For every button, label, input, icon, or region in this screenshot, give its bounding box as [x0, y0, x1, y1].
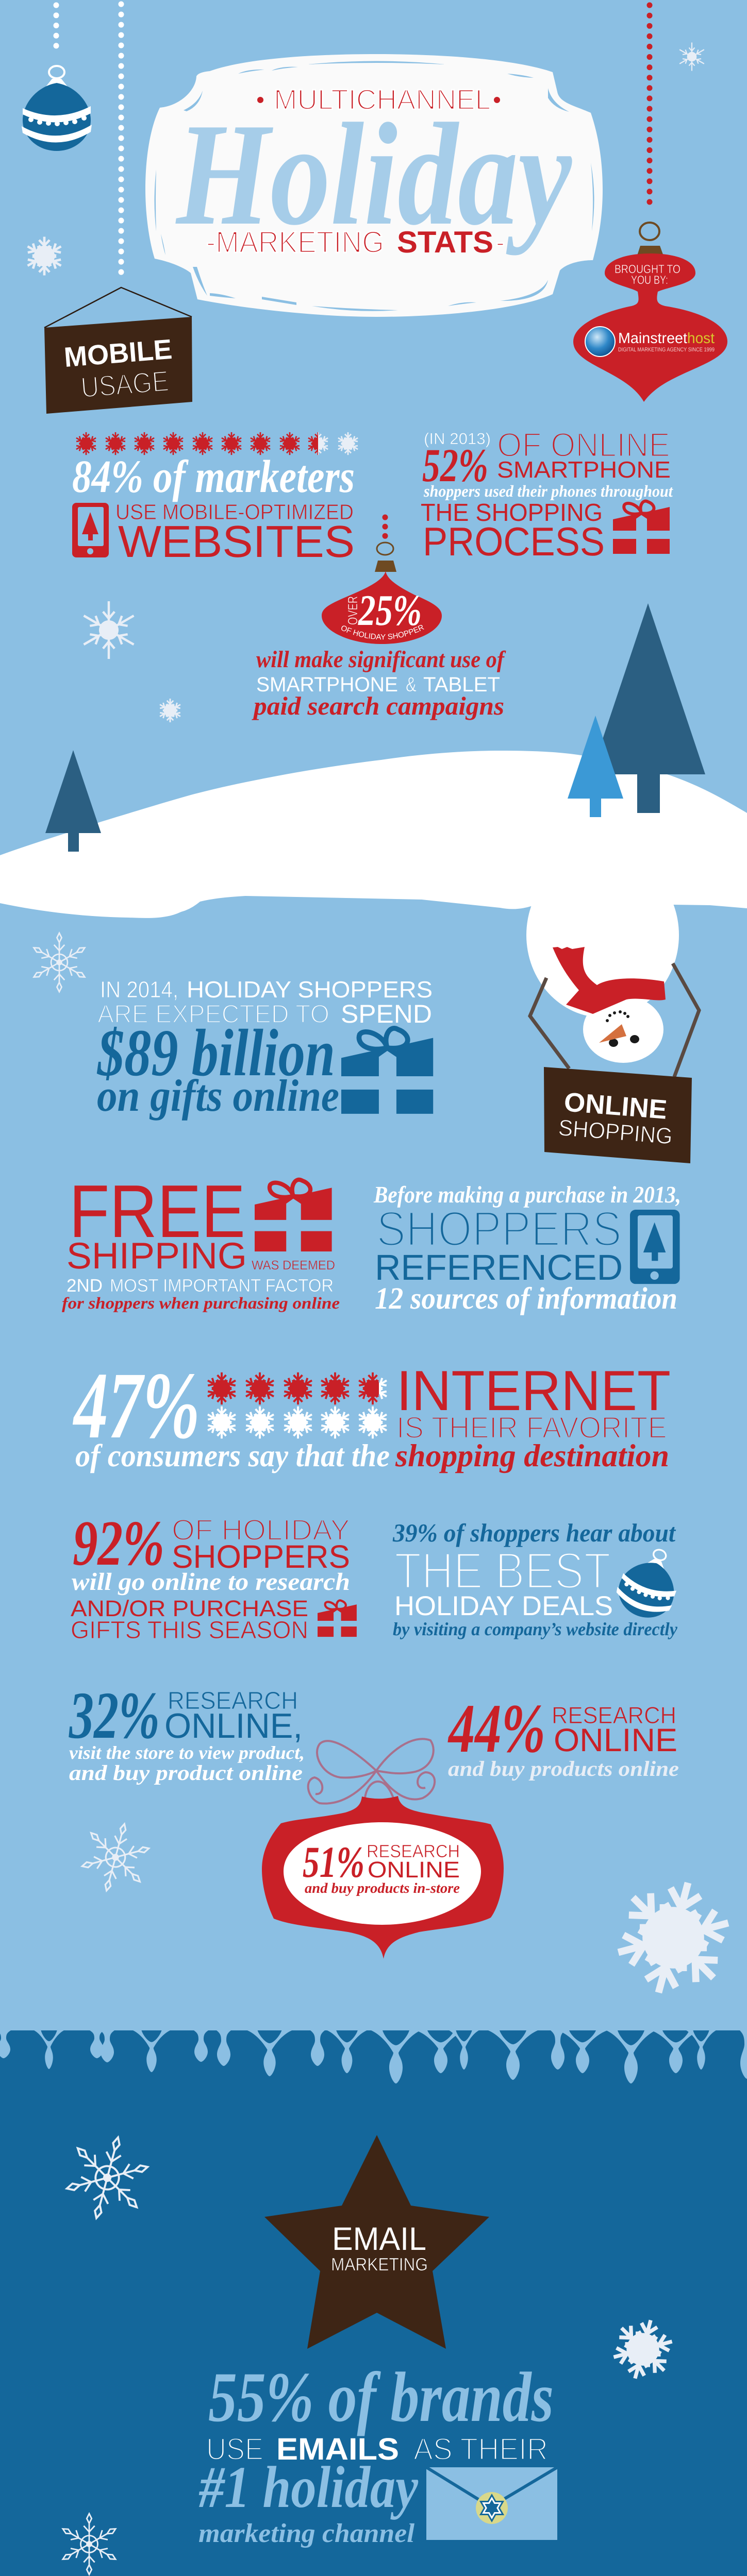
stat: paid search campaigns: paid search campaigns: [252, 691, 504, 720]
ornament: 51% research online: and buy products in-store: [305, 1880, 460, 1896]
stat: 49% of all emails: [121, 2560, 643, 2576]
stat: 47% internet: of consumers say that the: [75, 1438, 390, 1473]
stat: shoppers referenced 12 sources: REFERENCED: [375, 1247, 623, 1287]
snowflake thin: [58, 2127, 157, 2228]
stat: shoppers referenced 12 sources: SHOPPERS: [376, 1201, 622, 1257]
brought to you by: [615, 262, 680, 286]
stat: free shipping: WAS DEEMED: [252, 1258, 335, 1273]
star: email marketing: MARKETING: [331, 2255, 428, 2275]
stat: paid search campaigns: will make significant use of: [256, 646, 506, 672]
brought to you by: BROUGHT TO: [615, 262, 680, 276]
stat: free shipping: [62, 1170, 340, 1312]
logo: Mainstreethost wordmark: host: [687, 330, 715, 347]
stat: 39% the best holiday deals: by visiting a company’s website directly: [393, 1619, 678, 1639]
stat: 55% of brands: [198, 2358, 557, 2548]
stat: shoppers referenced 12 sources: Before making a purchase in 2013,: [373, 1181, 681, 1208]
stat: 92% of holiday shoppers: AND/OR PURCHASE: [71, 1596, 308, 1621]
snowflake grid 47 percent: [205, 1372, 389, 1438]
stat: free shipping: for shoppers when purchasing online: [62, 1294, 340, 1312]
ornament: 51% research online: RESEARCH: [367, 1841, 460, 1861]
stat: $89 billion on gifts online: ARE EXPECTED TO: [97, 999, 329, 1028]
icon: blue gift: [341, 1028, 433, 1114]
icon: tilted ornament: [610, 1540, 688, 1625]
logo: Mainstreethost wordmark: [618, 330, 715, 353]
star: email marketing: [264, 2135, 489, 2349]
stat: 32% research online: RESEARCH: [168, 1687, 298, 1715]
snowflake left: [25, 237, 64, 275]
snowflake thin: [31, 933, 87, 992]
stat: 47% internet: INTERNET: [396, 1359, 671, 1422]
stat: 52% of online smartphone shoppers: 52%: [422, 439, 488, 492]
stat: 44% research online: ONLINE: [554, 1722, 677, 1758]
icon: phone: [72, 503, 109, 557]
stat: $89 billion on gifts online: HOLIDAY SHOPPERS: [187, 976, 433, 1003]
section: mobile usage header: [22, 4, 727, 414]
stat: 84% of marketers: USE MOBILE-OPTIMIZED: [115, 500, 354, 524]
stat: 92% of holiday shoppers: [71, 1508, 357, 1644]
sign: online shopping: ONLINE: [563, 1087, 668, 1125]
stat: 84% of marketers: WEBSITES: [118, 517, 355, 567]
title plaque: [145, 54, 603, 317]
stat: $89 billion on gifts online: [96, 976, 433, 1121]
snow hill: [0, 751, 747, 918]
icon: gift: [255, 1180, 332, 1251]
stat: free shipping: SHIPPING: [67, 1235, 247, 1277]
stat: 52% of online smartphone shoppers: PROCESS: [423, 519, 605, 564]
scene: snow hill with trees: [0, 603, 747, 918]
snowflake small: [158, 699, 182, 722]
tree: left dark: [45, 750, 101, 852]
icon: blue ornament: [22, 66, 92, 151]
subtitle: marketing stats: -MARKETING: [206, 225, 384, 259]
stat: 92% of holiday shoppers: GIFTS THIS SEASON: [71, 1617, 308, 1644]
stat: $89 billion on gifts online: IN 2014,: [100, 976, 178, 1003]
stat: 39% the best holiday deals: HOLIDAY DEALS: [394, 1591, 613, 1621]
sponsor ornament: [573, 223, 727, 402]
snowflake thin: [75, 1816, 156, 1899]
sign: mobile usage: USAGE: [79, 364, 170, 404]
stat: 32% research online: and buy product online: [69, 1761, 303, 1785]
stat: 55% of brands: EMAILS: [276, 2432, 399, 2466]
stat: free shipping: FREE: [69, 1170, 245, 1253]
subtitle: marketing stats: STATS: [397, 225, 493, 259]
stat: paid search campaigns: TABLET: [423, 673, 500, 696]
stat: paid search campaigns: [252, 646, 506, 720]
stat: 92% of holiday shoppers: will go online to research: [72, 1568, 350, 1596]
title: Holiday: Holiday: [174, 93, 573, 256]
section: mobile stats: [72, 426, 673, 722]
stat: paid search campaigns: SMARTPHONE: [256, 673, 398, 696]
stat: free shipping: 2ND: [67, 1276, 103, 1296]
upside-down snowman: [526, 853, 699, 1077]
stat: paid search campaigns: &: [406, 673, 417, 696]
stat: 55% of brands: marketing channel: [198, 2519, 415, 2548]
ornament: over 25% of holiday shoppers: OVER: [345, 596, 360, 625]
ornament: over 25% of holiday shoppers: [322, 514, 442, 644]
stat: 52% of online smartphone shoppers: OF ONLINE: [497, 426, 670, 464]
ornament: over 25% of holiday shoppers: OF HOLIDAY SHOPPERS: [341, 625, 424, 640]
sign: online shopping: [544, 1067, 692, 1163]
stat: $89 billion on gifts online: $89 billion: [96, 1016, 335, 1090]
stat: 55% of brands: #1 holiday: [198, 2454, 419, 2520]
stat: 84% of marketers: [72, 432, 359, 567]
stat: shoppers referenced 12 sources: [373, 1181, 681, 1315]
stat: 52% of online smartphone shoppers: shoppers used their phones throughout: [423, 482, 673, 500]
stat: 92% of holiday shoppers: 92%: [73, 1508, 164, 1579]
snowflake top right: [678, 42, 706, 71]
brought to you by: YOU BY:: [631, 273, 668, 286]
tree: light blue: [568, 716, 623, 817]
ornament: over 25% of holiday shoppers: 25%: [357, 586, 422, 635]
stat: 92% of holiday shoppers: SHOPPERS: [172, 1539, 350, 1575]
stat: $89 billion on gifts online: on gifts online: [97, 1071, 339, 1121]
stat: shoppers referenced 12 sources: 12 sources of information: [375, 1281, 677, 1315]
stat: 55% of brands: 55% of brands: [208, 2358, 554, 2436]
stat: 47% internet: [72, 1371, 670, 1473]
stat: $89 billion on gifts online: SPEND: [341, 999, 432, 1028]
title line: multichannel: MULTICHANNEL: [274, 83, 491, 115]
stat: 47% internet: shopping destination: [395, 1438, 669, 1473]
sign: mobile usage: [44, 287, 192, 414]
stat: 47% internet: 47%: [73, 1353, 200, 1459]
tree: large dark: [591, 603, 705, 813]
snowflake large: [603, 1868, 743, 2008]
string of white beads to sign: [119, 4, 124, 281]
snowflake thin: [60, 2514, 118, 2574]
stat: 44% research online: and buy products online: [448, 1757, 679, 1781]
stat: 32% research online: [69, 1679, 305, 1785]
stat: 44% research online: 44%: [447, 1690, 545, 1767]
stat: 55% of brands: AS THEIR: [413, 2432, 548, 2466]
snowflake solid: [606, 2312, 680, 2386]
icon: small gift: [318, 1600, 357, 1637]
stat: 44% research online: [447, 1690, 679, 1781]
stat: 32% research online: ONLINE,: [164, 1706, 303, 1745]
stat: 44% research online: RESEARCH: [552, 1702, 676, 1728]
ornament: 51% research online: ONLINE: [368, 1857, 460, 1883]
subtitle: marketing stats: -: [496, 225, 505, 259]
sign: mobile usage: MOBILE: [63, 334, 173, 373]
subtitle: marketing stats: [206, 225, 505, 259]
stat: 32% research online: visit the store to view product,: [69, 1742, 305, 1763]
dark blue band: [0, 2030, 747, 2576]
stat: 39% the best holiday deals: [392, 1518, 688, 1639]
stat: 52% of online smartphone shoppers: (IN 2013): [424, 430, 491, 448]
section: online shopping: [31, 853, 743, 2008]
string of white beads left: [54, 5, 59, 56]
icon: red gift: [613, 501, 670, 554]
icicle border: [0, 2030, 747, 2083]
stat: 84% of marketers: 84% of marketers: [72, 451, 355, 502]
sign: online shopping: SHOPPING: [557, 1115, 673, 1149]
stat: 39% the best holiday deals: THE BEST: [394, 1542, 611, 1600]
logo: globe: [585, 327, 615, 357]
stat: 55% of brands: USE: [206, 2432, 263, 2466]
stat: 39% the best holiday deals: 39% of shoppers hear about: [392, 1518, 676, 1547]
string of red beads: [646, 5, 653, 211]
icon: envelope: [426, 2467, 557, 2540]
snowflake: [81, 601, 137, 659]
logo: Mainstreethost wordmark: Mainstreet: [618, 330, 687, 347]
stat: 92% of holiday shoppers: OF HOLIDAY: [172, 1514, 350, 1547]
star: email marketing: EMAIL: [332, 2221, 426, 2257]
snowflake row 84 percent: [75, 432, 359, 455]
stat: 47% internet: IS THEIR FAVORITE: [396, 1411, 667, 1445]
section: email marketing: [0, 2030, 747, 2576]
stat: 52% of online smartphone shoppers: [421, 426, 673, 564]
ornament: 51% research online: 51%: [303, 1837, 364, 1887]
stat: 52% of online smartphone shoppers: THE SHOPPING: [421, 499, 603, 527]
stat: free shipping: MOST IMPORTANT FACTOR: [110, 1276, 334, 1296]
stat: 32% research online: 32%: [69, 1679, 160, 1753]
logo: Mainstreethost wordmark: DIGITAL MARKETING AGENCY SINCE 1999: [618, 347, 715, 353]
stat: 52% of online smartphone shoppers: SMARTPHONE: [497, 456, 671, 483]
ornament: 51% research online: [262, 1739, 504, 1959]
icon: blue phone: [630, 1210, 680, 1284]
